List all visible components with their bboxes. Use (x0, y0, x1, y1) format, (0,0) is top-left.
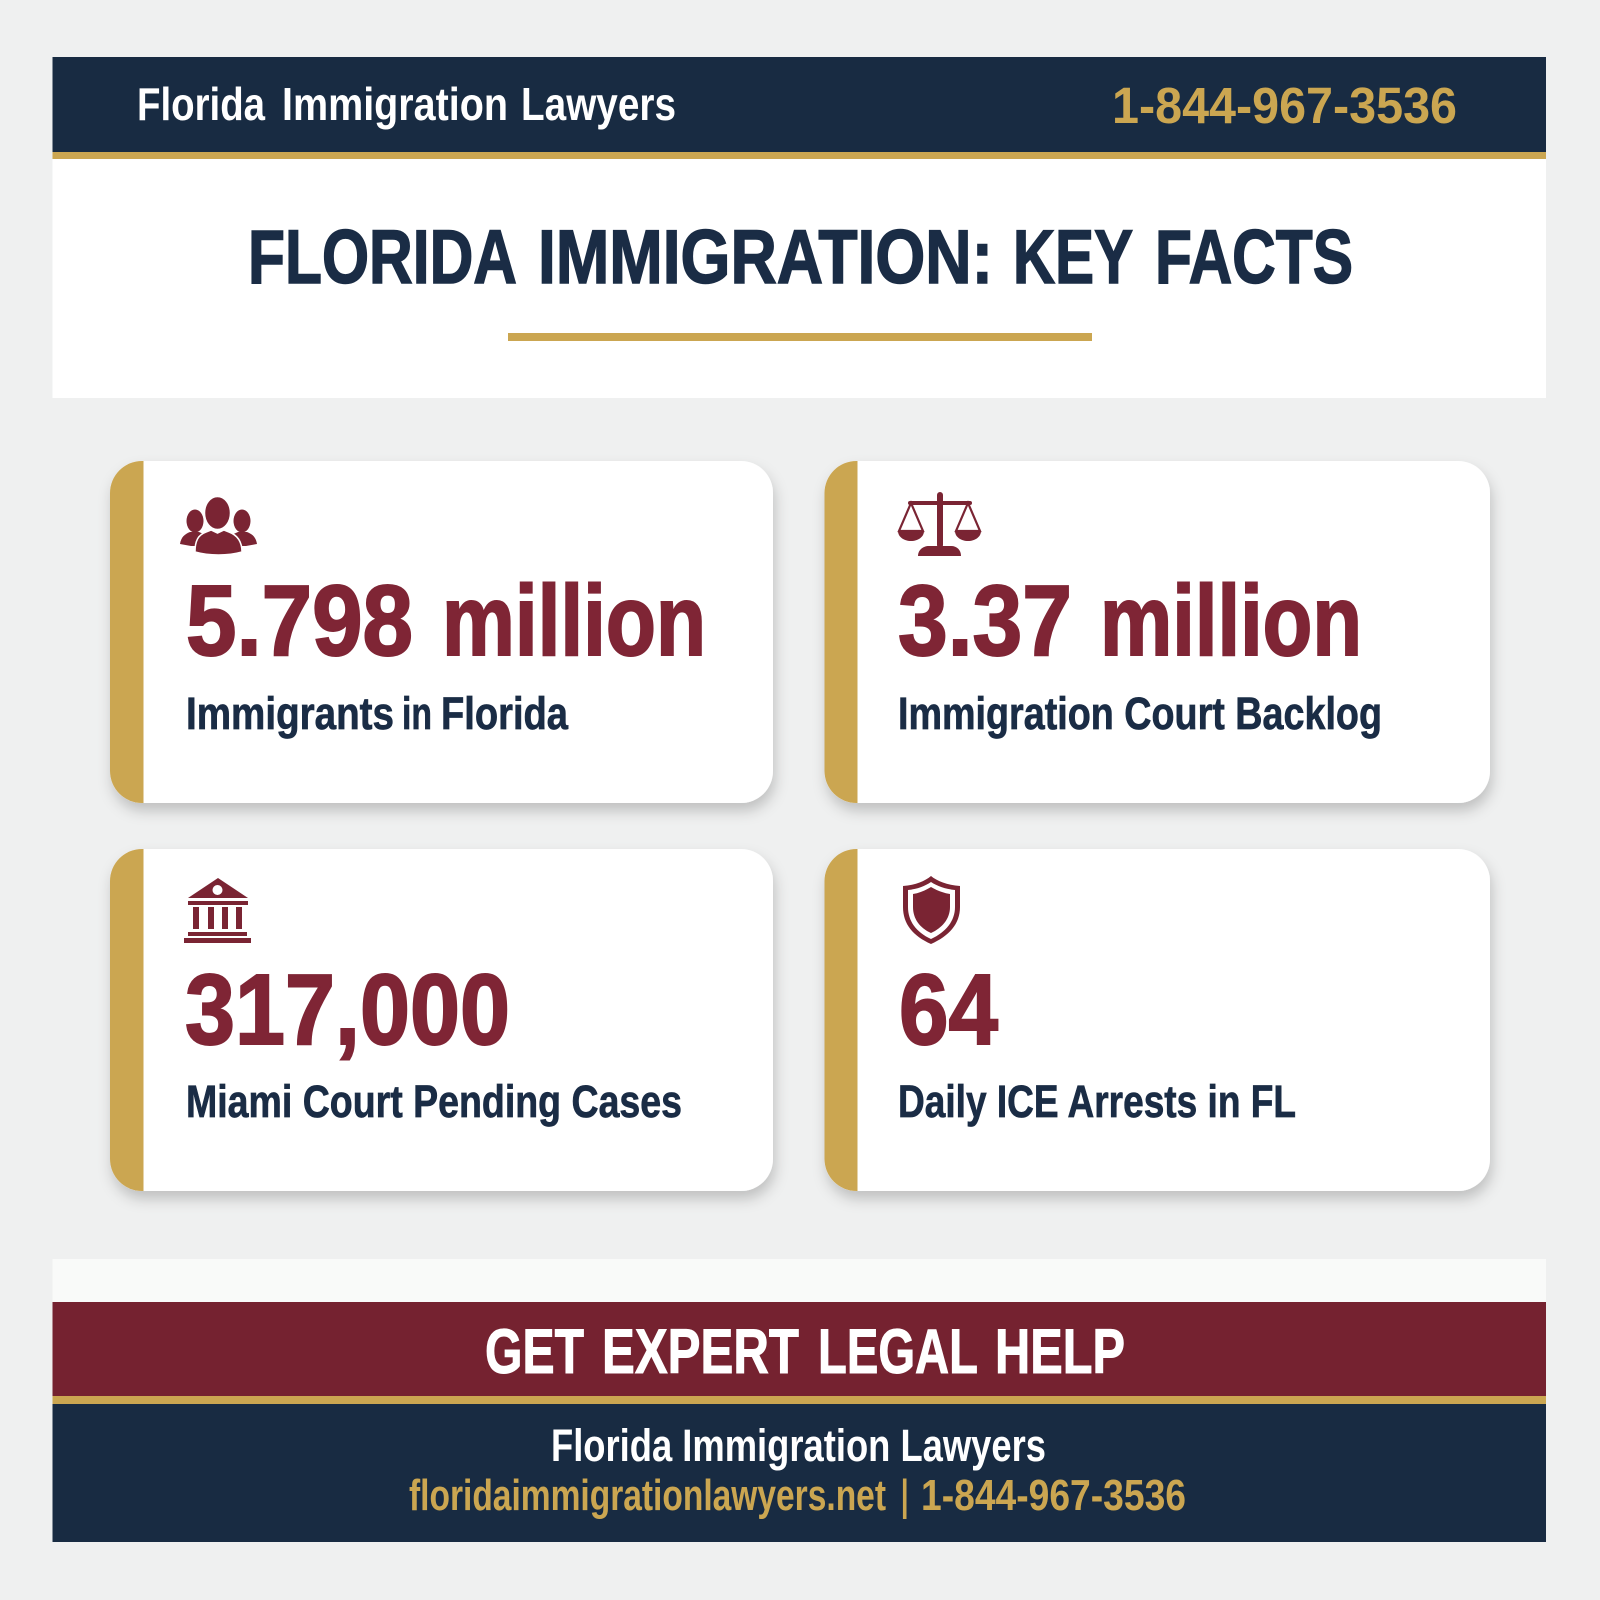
header firm name: Florida (137, 78, 265, 130)
footer panel (52, 1259, 1546, 1542)
call to action band: EXPERT (602, 1317, 799, 1387)
icon: courthouse (184, 878, 251, 943)
value (186, 565, 706, 677)
contact band: | (899, 1471, 910, 1520)
label: Florida (441, 688, 569, 739)
value: 3.37 (898, 565, 1072, 677)
header bar (52, 57, 1546, 159)
value: 64 (899, 954, 998, 1066)
label: Immigrants (186, 688, 394, 739)
value (898, 565, 1362, 677)
header firm name (137, 78, 676, 130)
label: Immigration Court Backlog (898, 688, 1382, 739)
call to action band (52, 1302, 1546, 1396)
main title: IMMIGRATION: (538, 215, 993, 300)
card: immigrants in Florida (110, 461, 773, 803)
value: 5.798 (186, 565, 413, 677)
title underline (508, 333, 1092, 341)
main title: KEY (1013, 215, 1133, 300)
contact band: floridaimmigrationlawyers.net (409, 1471, 886, 1520)
contact band: Florida Immigration Lawyers (551, 1420, 1046, 1471)
contact band: 1-844-967-3536 (921, 1471, 1186, 1520)
call to action band: GET (485, 1317, 584, 1387)
value: million (442, 565, 706, 677)
label: Daily ICE Arrests in FL (898, 1076, 1296, 1127)
icon: shield (903, 876, 960, 944)
card: daily ICE arrests (824, 849, 1490, 1191)
card: Miami court pending cases (110, 849, 773, 1191)
label: in (402, 688, 432, 739)
value: million (1100, 565, 1362, 677)
label: Miami Court Pending Cases (186, 1076, 682, 1127)
main title (248, 215, 1353, 300)
card: immigration court backlog (824, 461, 1490, 803)
icon: scales of justice (898, 492, 981, 556)
main title: FACTS (1155, 215, 1353, 300)
header phone number: 1-844-967-3536 (1112, 77, 1457, 134)
contact band (52, 1404, 1546, 1542)
call to action band: LEGAL (818, 1317, 978, 1387)
label (186, 688, 569, 739)
main title: FLORIDA (248, 215, 517, 300)
title panel (52, 159, 1546, 398)
header firm name: Lawyers (521, 78, 676, 130)
call to action band: HELP (995, 1317, 1125, 1387)
value: 317,000 (185, 954, 510, 1066)
header firm name: Immigration (282, 78, 508, 130)
icon: people (180, 496, 257, 555)
